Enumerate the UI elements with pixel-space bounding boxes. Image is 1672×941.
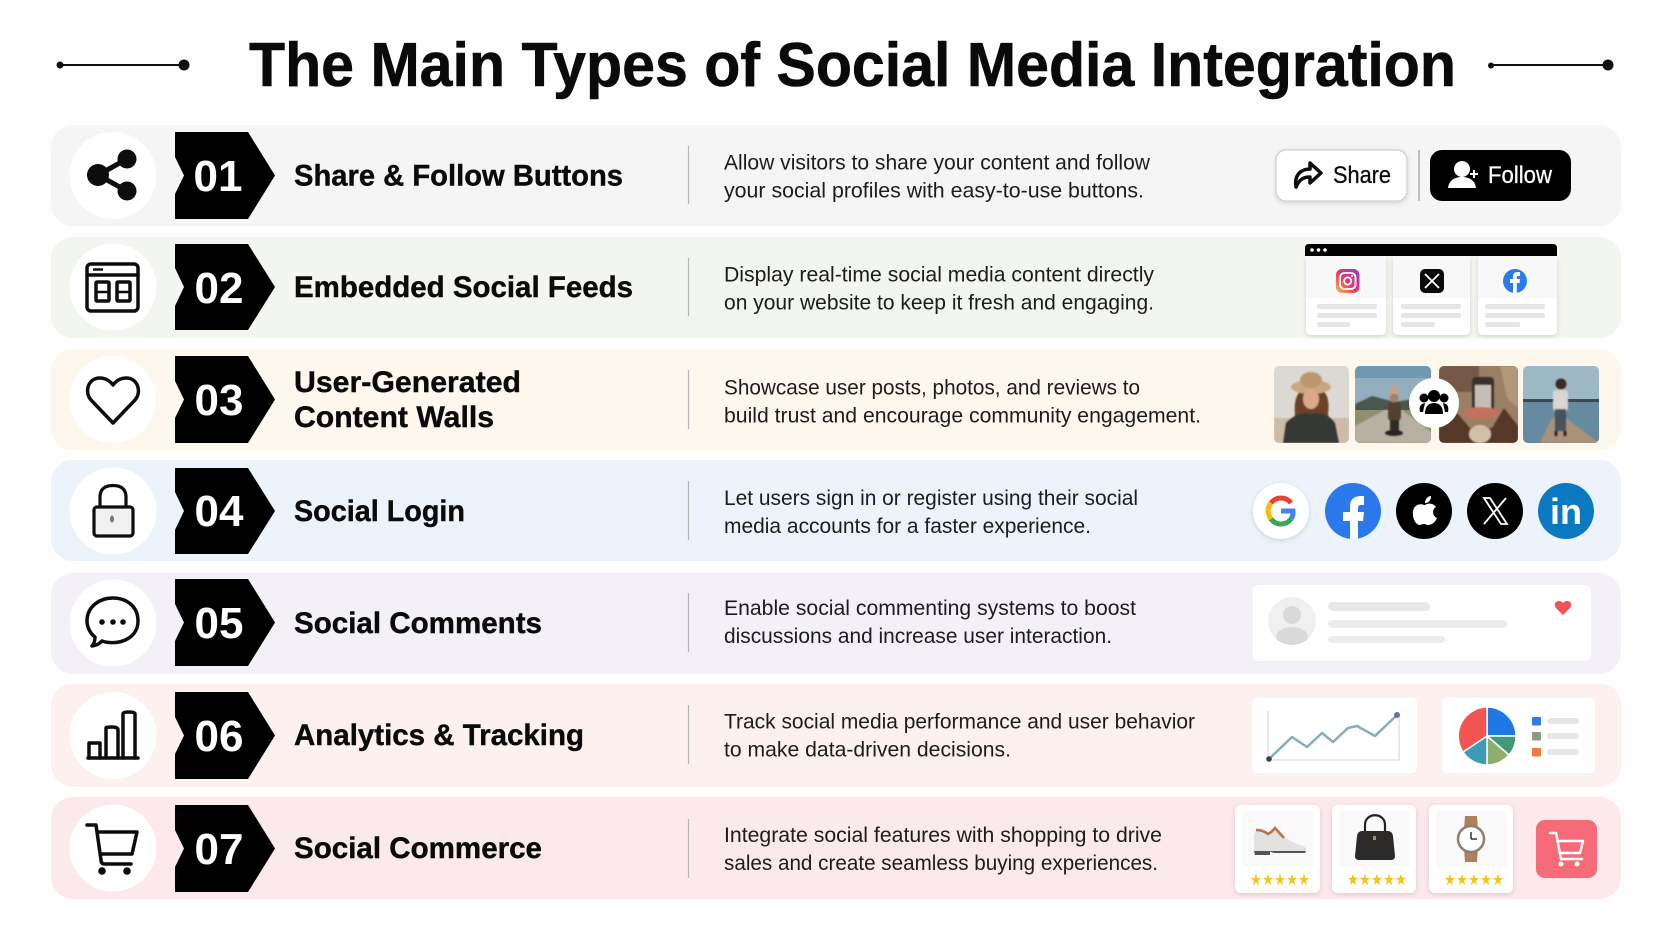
number badge 07 — [175, 805, 275, 892]
icon: google — [1253, 483, 1309, 539]
icon: shopping cart — [70, 804, 156, 892]
description: Allow visitors to share your content and follow — [724, 152, 1151, 174]
photo: person on a pier — [1523, 366, 1599, 443]
description: your social profiles with easy-to-use buttons. — [724, 180, 1144, 202]
divider between buttons — [1418, 150, 1420, 201]
number badge 03: 03 — [195, 376, 243, 425]
placeholder lines — [1328, 602, 1507, 643]
icon: x — [1467, 483, 1523, 539]
heading: Embedded Social Feeds — [294, 271, 633, 304]
number badge 04: 04 — [195, 487, 244, 536]
heading: Analytics & Tracking — [294, 719, 584, 752]
number badge 01 — [175, 132, 275, 219]
row background — [51, 573, 1621, 674]
line chart card — [1252, 698, 1417, 773]
icon: community badge — [1409, 378, 1459, 428]
pie chart card — [1442, 698, 1595, 773]
icon: linkedin — [1538, 483, 1594, 539]
icon: browser window — [70, 244, 156, 330]
photo: woman in hat — [1274, 366, 1349, 443]
photo: hands holding a phone — [1439, 366, 1518, 443]
panel: 05 social comments — [51, 573, 1621, 674]
description: Integrate social features with shopping to drive — [724, 824, 1162, 847]
divider — [688, 481, 690, 540]
number badge 02: 02 — [195, 264, 243, 313]
icon: like heart — [1555, 601, 1571, 615]
icon: padlock — [70, 468, 156, 554]
description — [724, 824, 1162, 875]
description: Showcase user posts, photos, and reviews to — [724, 376, 1140, 400]
follow button — [1430, 150, 1571, 201]
panel: 06 analytics and tracking — [51, 684, 1621, 787]
heading: Social Comments — [294, 607, 542, 640]
description — [724, 710, 1195, 762]
description: build trust and encourage community engagement. — [724, 404, 1201, 428]
product card: handbag: ★★★★★ — [1347, 872, 1407, 889]
description: Enable social commenting systems to boost — [724, 597, 1136, 620]
panel: 02 embedded social feeds — [51, 237, 1621, 338]
row background — [51, 125, 1621, 226]
feed card: x — [1393, 256, 1470, 335]
divider — [688, 705, 690, 764]
number badge 03 — [175, 356, 275, 443]
description: to make data-driven decisions. — [724, 738, 1011, 762]
number badge 02 — [175, 244, 275, 330]
avatar — [1268, 597, 1316, 647]
divider — [688, 593, 690, 652]
heading: Social Login — [294, 495, 465, 528]
photo: traveller on a path — [1355, 366, 1431, 443]
product card: watch: ★★★★★ — [1444, 872, 1504, 889]
left title ornament — [56, 60, 190, 70]
panel: 07 social commerce — [51, 797, 1621, 899]
heading: User-Generated — [294, 366, 521, 399]
divider — [688, 258, 690, 316]
feed window mockup — [1305, 244, 1557, 335]
panel: 01 share and follow buttons — [51, 125, 1621, 226]
feed card: instagram — [1306, 256, 1386, 335]
divider — [688, 370, 690, 429]
icon: cart button — [1536, 820, 1597, 878]
number badge 01: 01 — [194, 152, 242, 201]
row background — [51, 797, 1621, 899]
number badge 04 — [175, 468, 275, 554]
description — [724, 376, 1201, 428]
comment card — [1253, 585, 1591, 661]
panel: 04 social login — [51, 460, 1621, 561]
heading: Share & Follow Buttons — [294, 160, 623, 192]
description: Display real-time social media content directly — [724, 264, 1155, 286]
follow button: Follow — [1488, 162, 1553, 189]
product card: handbag — [1332, 805, 1416, 893]
heading: Content Walls — [294, 401, 494, 434]
description: Let users sign in or register using their social — [724, 487, 1138, 510]
heading — [294, 366, 521, 434]
description: Track social media performance and user behavior — [724, 710, 1195, 734]
number badge 06 — [175, 692, 275, 779]
description: media accounts for a faster experience. — [724, 515, 1091, 538]
heading: Social Commerce — [294, 832, 542, 865]
feed card: facebook — [1478, 256, 1557, 335]
description: sales and create seamless buying experiences. — [724, 852, 1158, 875]
right title ornament — [1488, 60, 1614, 70]
icon: bar chart — [70, 692, 156, 779]
icon: speech bubble — [70, 580, 156, 666]
panel: 03 user-generated content walls — [51, 349, 1621, 450]
row background — [51, 684, 1621, 787]
icon: heart — [70, 356, 156, 443]
product card: watch — [1429, 805, 1513, 893]
description: on your website to keep it fresh and engaging. — [724, 292, 1154, 314]
title: The Main Types of Social Media Integration — [249, 31, 1456, 100]
number badge 07: 07 — [195, 825, 243, 874]
icon: share — [70, 132, 156, 219]
share button — [1276, 150, 1407, 201]
icon: apple — [1396, 483, 1452, 539]
icon: linkedin: in — [1550, 491, 1582, 532]
description — [724, 264, 1155, 314]
pie chart — [1458, 707, 1516, 765]
description — [724, 487, 1138, 538]
row background — [51, 237, 1621, 338]
product card: shoe — [1235, 805, 1320, 893]
divider — [688, 146, 690, 204]
description: discussions and increase user interaction. — [724, 625, 1112, 648]
product card: shoe: ★★★★★ — [1250, 872, 1310, 889]
number badge 05 — [175, 579, 275, 666]
window title bar — [1305, 244, 1557, 256]
row background — [51, 349, 1621, 450]
pie legend — [1532, 717, 1579, 756]
description — [724, 597, 1136, 648]
number badge 05: 05 — [195, 599, 243, 648]
number badge 06: 06 — [195, 712, 243, 761]
icon: facebook — [1325, 483, 1381, 540]
share button: Share — [1333, 162, 1391, 189]
row background — [51, 460, 1621, 561]
description — [724, 152, 1151, 202]
divider — [688, 819, 690, 878]
